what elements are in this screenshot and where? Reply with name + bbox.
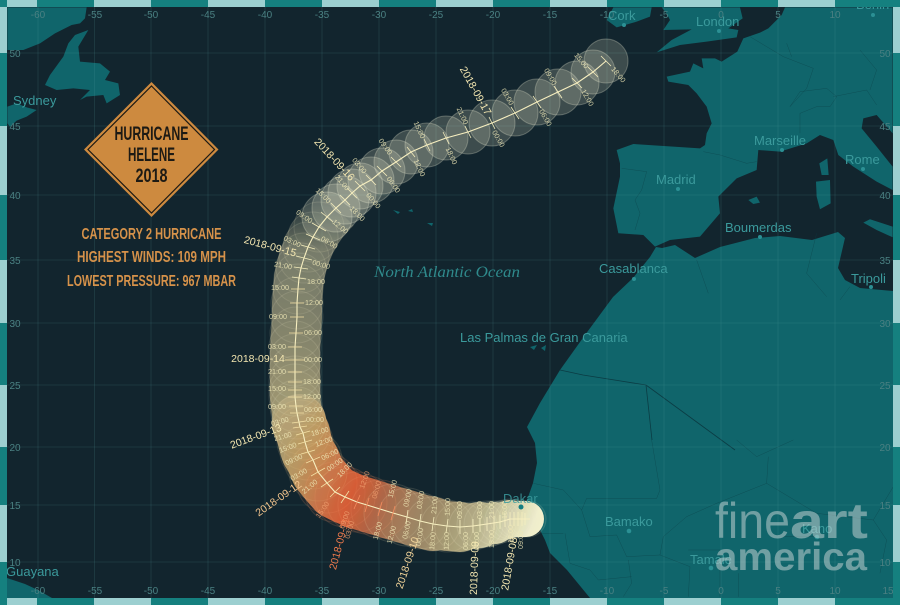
longitude labels, top: -20 bbox=[486, 10, 501, 21]
latitude labels, right: 25 bbox=[879, 381, 891, 392]
city labels: London bbox=[696, 14, 739, 29]
date labels: 2018-09-16 bbox=[311, 136, 357, 184]
latitude labels, right: 40 bbox=[879, 191, 891, 202]
land: Canary Islands bbox=[530, 345, 546, 351]
date labels: 2018-09-14 bbox=[231, 353, 285, 365]
time labels: north section: 03:00 bbox=[499, 87, 516, 107]
time labels: north section: 12:00 bbox=[579, 88, 596, 108]
wind swath circles: near Dakar bbox=[449, 499, 546, 550]
land: Sardinia bbox=[816, 180, 831, 209]
city labels: Kano bbox=[802, 521, 832, 536]
time labels: bottom section: 03:00 bbox=[343, 520, 356, 540]
longitude labels, top: -5 bbox=[660, 10, 669, 21]
latitude labels, right: 45 bbox=[879, 122, 891, 133]
longitude labels, top: -60 bbox=[31, 10, 46, 21]
time labels: north section: 06:00 bbox=[537, 108, 554, 128]
longitude labels, top: -55 bbox=[88, 10, 103, 21]
longitude labels, bottom: 0 bbox=[718, 586, 724, 597]
time labels: middle section: 03:00 bbox=[270, 415, 290, 428]
latitude labels, right: 15 bbox=[879, 501, 891, 512]
time labels: bottom section: 18:00 bbox=[487, 530, 496, 548]
city labels: Boumerdas bbox=[725, 220, 792, 235]
time labels: middle section: 00:00 bbox=[304, 355, 322, 364]
longitude labels, bottom: 15 bbox=[882, 586, 894, 597]
longitude labels, bottom: -55 bbox=[88, 586, 103, 597]
time labels: north section: 21:00 bbox=[455, 106, 470, 126]
longitude labels, top: -10 bbox=[600, 10, 615, 21]
storm track line bbox=[295, 61, 606, 527]
date labels: 2018-09-15 bbox=[243, 234, 298, 260]
city labels: Bamako bbox=[605, 514, 653, 529]
time labels: middle section: 12:00 bbox=[305, 298, 323, 307]
time labels: north section: 18:00 bbox=[444, 146, 459, 166]
time labels: middle section: 18:00 bbox=[303, 377, 321, 386]
city dots bbox=[622, 13, 875, 570]
longitude labels, top: -35 bbox=[315, 10, 330, 21]
time labels: bottom section: 03:00 bbox=[475, 501, 484, 519]
time labels: north section: 12:00 bbox=[331, 217, 350, 236]
wind swath circles: turning north bbox=[269, 202, 344, 449]
time labels: north section bbox=[273, 51, 628, 271]
latitude labels, right: 30 bbox=[879, 319, 891, 330]
time labels: bottom section: 06:00 bbox=[461, 532, 470, 550]
city label: Dakar: Dakar bbox=[503, 491, 538, 506]
time labels: middle section: 06:00 bbox=[304, 328, 322, 337]
wind swath circles: gold bend bbox=[273, 400, 347, 501]
track ticks: middle bbox=[285, 289, 349, 503]
longitude labels, bottom: 10 bbox=[829, 586, 841, 597]
time labels: bottom section bbox=[314, 470, 525, 550]
longitude labels, bottom: 5 bbox=[775, 586, 781, 597]
time labels: middle section: 00:00 bbox=[306, 415, 324, 424]
date labels: 2018-09-08 bbox=[499, 536, 520, 591]
land: Africa bbox=[527, 232, 893, 598]
wind swath circles: west-bound section bbox=[364, 484, 485, 552]
time labels: bottom section: 09:00 bbox=[516, 531, 525, 549]
time labels: bottom section: 12:00 bbox=[506, 525, 515, 543]
city labels: Las Palmas de Gran Canaria bbox=[460, 330, 628, 345]
track ticks: lower bbox=[406, 510, 525, 534]
land: Sicily bbox=[863, 219, 893, 237]
time labels: north section: 09:00 bbox=[542, 67, 559, 87]
time labels: bottom section: 09:00 bbox=[401, 488, 414, 508]
time labels: bottom section: 03:00 bbox=[414, 490, 426, 510]
time labels: middle section: 18:00 bbox=[310, 425, 330, 438]
time labels: bottom section: 00:00 bbox=[413, 527, 425, 547]
city labels: Sydney bbox=[13, 93, 57, 108]
latitude labels, left: 25 bbox=[9, 381, 21, 392]
ocean label: North Atlantic Ocean bbox=[373, 264, 520, 281]
longitude labels, top: -40 bbox=[258, 10, 273, 21]
hurricane warning sign bbox=[84, 82, 218, 217]
latitude labels, left: 50 bbox=[9, 49, 21, 60]
time labels: bottom section: 21:00 bbox=[429, 496, 440, 514]
time labels: north section: 15:00 bbox=[412, 120, 427, 140]
longitude labels, top: -50 bbox=[144, 10, 159, 21]
longitude labels, bottom: -25 bbox=[429, 586, 444, 597]
time labels: middle section: 12:00 bbox=[314, 434, 334, 449]
storm statistics bbox=[67, 226, 236, 290]
time labels: bottom section: 06:00 bbox=[370, 480, 383, 500]
watermark: america bbox=[715, 536, 867, 579]
time labels: bottom section: 12:00 bbox=[442, 532, 451, 550]
time labels: middle section: 15:00 bbox=[268, 384, 286, 393]
longitude labels, bottom: -45 bbox=[201, 586, 216, 597]
longitude labels, top: 5 bbox=[775, 10, 781, 21]
time labels: bottom section: 00:00 bbox=[472, 532, 481, 550]
longitude labels, bottom: -30 bbox=[372, 586, 387, 597]
time labels: north section: 00:00 bbox=[490, 129, 507, 149]
date labels: 2018-09-10 bbox=[394, 535, 422, 590]
hurricane warning sign: HELENE bbox=[128, 145, 175, 166]
time labels: bottom section: 09:00 bbox=[455, 501, 464, 519]
longitude labels, top: 10 bbox=[829, 10, 841, 21]
time labels: middle section: 21:00 bbox=[268, 367, 286, 376]
time labels: north section: 03:00 bbox=[282, 234, 302, 249]
time labels: bottom section: 21:00 bbox=[487, 501, 496, 519]
time labels: bottom section: 15:00 bbox=[500, 501, 509, 519]
land: Azores bbox=[393, 209, 433, 226]
time labels: bottom section: 12:00 bbox=[385, 525, 398, 545]
longitude labels, top bbox=[31, 10, 841, 21]
storm statistics: HIGHEST WINDS: 109 MPH bbox=[77, 249, 226, 266]
latitude labels, left: 45 bbox=[9, 122, 21, 133]
swath base: north leg bbox=[295, 208, 336, 422]
time labels: bottom section: 18:00 bbox=[371, 521, 384, 541]
time labels: middle section: 18:00 bbox=[307, 277, 325, 286]
latitude labels, left: 15 bbox=[9, 501, 21, 512]
time labels: north section: 12:00 bbox=[412, 158, 427, 178]
land: Great Britain bbox=[657, 7, 743, 52]
longitude labels, bottom: -5 bbox=[660, 586, 669, 597]
longitude labels, bottom: -40 bbox=[258, 586, 273, 597]
land: Nova Scotia bbox=[7, 103, 37, 127]
storm statistics: CATEGORY 2 HURRICANE bbox=[82, 226, 222, 243]
time labels: middle section: 21:00 bbox=[273, 430, 293, 443]
swath base: south leg bbox=[299, 421, 526, 527]
time labels: bottom section: 18:00 bbox=[427, 532, 438, 550]
longitude labels, bottom: -60 bbox=[31, 586, 46, 597]
time labels: bottom section: 06:00 bbox=[400, 520, 413, 540]
latitude labels, left: 20 bbox=[9, 443, 21, 454]
time labels: north section: 03:00 bbox=[350, 156, 369, 175]
city labels: Madrid bbox=[656, 172, 696, 187]
watermark: fine bbox=[715, 493, 790, 549]
latitude labels, left: 10 bbox=[9, 558, 21, 569]
storm statistics: LOWEST PRESSURE: 967 MBAR bbox=[67, 273, 236, 290]
longitude labels, bottom: -20 bbox=[486, 586, 501, 597]
latitude labels, left: 40 bbox=[9, 191, 21, 202]
time labels: middle section: 15:00 bbox=[271, 283, 289, 292]
hurricane track bbox=[229, 39, 628, 595]
time labels: middle section bbox=[268, 277, 354, 496]
time labels: middle section: 18:00 bbox=[335, 460, 354, 479]
city labels: Cork bbox=[608, 8, 636, 23]
watermark bbox=[715, 493, 868, 579]
time labels: north section: 09:00 bbox=[377, 137, 394, 157]
time labels: middle section: 12:00 bbox=[303, 392, 321, 401]
date labels: 2018-09-11 bbox=[327, 517, 352, 571]
time labels: middle section: 03:00 bbox=[268, 342, 286, 351]
time labels: middle section: 00:00 bbox=[325, 456, 345, 473]
longitude labels, top: -45 bbox=[201, 10, 216, 21]
time labels: north section: 15:00 bbox=[572, 51, 591, 70]
city labels: Marseille bbox=[754, 133, 806, 148]
city labels: Casablanca bbox=[599, 261, 668, 276]
time labels: middle section: 03:00 bbox=[289, 466, 309, 483]
date labels: 2018-09-17 bbox=[457, 64, 494, 117]
latitude labels, left: 35 bbox=[9, 256, 21, 267]
time labels: north section: 09:00 bbox=[294, 208, 314, 225]
land: Balearic Islands bbox=[748, 197, 760, 204]
city labels: Tamale bbox=[690, 552, 732, 567]
time labels: north section: 18:00 bbox=[609, 65, 628, 84]
longitude labels, bottom bbox=[31, 586, 894, 597]
land: Corsica bbox=[819, 158, 829, 175]
longitude labels, bottom: -15 bbox=[543, 586, 558, 597]
time labels: north section: 21:00 bbox=[273, 259, 293, 271]
time labels: bottom section: 15:00 bbox=[443, 498, 452, 516]
date labels bbox=[229, 64, 520, 595]
date labels: 2018-09-12 bbox=[253, 478, 304, 519]
time labels: middle section: 09:00 bbox=[269, 312, 287, 321]
city labels: Rome bbox=[845, 152, 880, 167]
time labels: bottom section: 12:00 bbox=[357, 470, 372, 490]
longitude labels, bottom: -35 bbox=[315, 586, 330, 597]
hurricane warning sign: HURRICANE bbox=[114, 124, 188, 145]
time labels: bottom section: 15:00 bbox=[386, 479, 399, 499]
land: South America bbox=[7, 578, 52, 598]
time labels: middle section: 21:00 bbox=[300, 477, 319, 496]
latitude labels, right: 10 bbox=[879, 558, 891, 569]
country borders bbox=[533, 37, 893, 597]
time labels: north section: 00:00 bbox=[364, 191, 383, 210]
land: Labrador and Quebec bbox=[7, 7, 87, 50]
wind swath circles: north section bbox=[302, 39, 628, 242]
time labels: middle section: 06:00 bbox=[320, 447, 340, 462]
latitude labels, left bbox=[9, 49, 21, 569]
latitude labels, left: 30 bbox=[9, 319, 21, 330]
longitude labels, bottom: -50 bbox=[144, 586, 159, 597]
track ticks: orange bbox=[354, 495, 395, 520]
time labels: bottom section: 15:00 bbox=[314, 500, 331, 520]
longitude labels, top: -25 bbox=[429, 10, 444, 21]
longitude labels, top: -30 bbox=[372, 10, 387, 21]
time labels: north section: 06:00 bbox=[385, 175, 402, 195]
date labels: 2018-09-09 bbox=[468, 541, 482, 595]
track ticks: upper bbox=[292, 56, 611, 279]
time labels: north section: 15:00 bbox=[314, 186, 333, 205]
hurricane warning sign: 2018 bbox=[136, 166, 168, 187]
land: Ireland bbox=[607, 7, 652, 27]
time labels: middle section: 09:00 bbox=[268, 402, 286, 411]
longitude labels, bottom: -10 bbox=[600, 586, 615, 597]
date labels: 2018-09-13 bbox=[229, 422, 283, 452]
longitude labels, top: 0 bbox=[718, 10, 724, 21]
time labels: middle section: 06:00 bbox=[304, 405, 322, 414]
time labels: north section: 18:00 bbox=[348, 204, 367, 223]
time labels: north section: 06:00 bbox=[319, 234, 339, 251]
time labels: middle section: 15:00 bbox=[278, 440, 298, 455]
watermark: art bbox=[790, 493, 868, 549]
latitude labels, right: 50 bbox=[879, 49, 891, 60]
wind swath circles: orange peak intensity bbox=[297, 453, 409, 538]
city labels: Guayana bbox=[6, 564, 60, 579]
time labels: middle section: 09:00 bbox=[284, 452, 304, 467]
time labels: north section: 21:00 bbox=[333, 173, 352, 192]
land: Newfoundland bbox=[45, 30, 120, 103]
land: continental Europe bbox=[613, 7, 893, 247]
city labels: Tripoli bbox=[851, 271, 886, 286]
latitude labels, right: 20 bbox=[879, 443, 891, 454]
latitude labels, right: 35 bbox=[879, 256, 891, 267]
longitude labels, top: -15 bbox=[543, 10, 558, 21]
time labels: north section: 00:00 bbox=[311, 258, 331, 271]
latitude labels, right bbox=[879, 49, 891, 569]
time labels: bottom section: 09:00 bbox=[337, 510, 352, 530]
